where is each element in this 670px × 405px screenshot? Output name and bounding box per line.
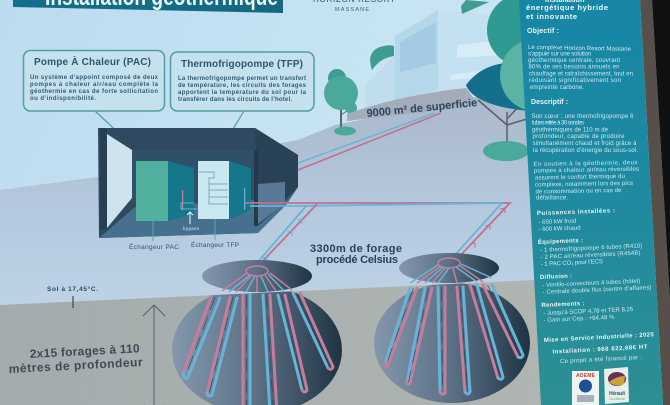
callout: Pompe à chaleur: Un système d’appoint composé de deux [30, 75, 159, 81]
label: Échangeur TFP [191, 219, 239, 249]
commissioning and cost: Installation : 968 822,68€ HT [552, 345, 648, 356]
description: tubes reliée à 30 sondes [532, 120, 584, 126]
well 1 sphere with boreholes [172, 286, 342, 405]
description: pompes à chaleur air/eau réversibles [534, 167, 639, 174]
PAC exchanger [136, 161, 194, 221]
efficiency: - Jusqu’à SCOP 4,78 et TER 8,25 [543, 307, 634, 317]
description: la récupération d’énergie du sous-sol. [533, 148, 638, 154]
callout: Pompe à chaleur: Pompe À Chaleur (PAC) [34, 55, 151, 68]
equipment [538, 233, 643, 268]
text: depth of boreholes: 2x15 forages à 110 [29, 341, 140, 361]
hill ground [0, 88, 545, 312]
depth arrow [143, 305, 165, 405]
label: Échangeur PAC [129, 221, 179, 251]
objective: s’appuie sur une solution [528, 52, 591, 58]
well 1 opening [202, 260, 312, 292]
callout: Thermofrigopompe: Thermofrigopompe (TFP) [181, 59, 303, 70]
logo: Horizon Resort Massane: MASSANE [335, 7, 369, 13]
callout: Pompe à chaleur: géothermie en cas de forte sollicitation [30, 89, 158, 95]
logo: Hérault [604, 367, 629, 404]
description [531, 99, 639, 202]
installed power: Puissances installées : [537, 208, 615, 217]
commissioning and cost [544, 332, 656, 366]
label: bypass: bypass [183, 226, 200, 231]
panel heading: et innovante [526, 12, 577, 21]
text: 3300m de forage [310, 243, 402, 266]
installed power: - 650 kW froid [538, 219, 576, 226]
surface label: 9000 m² [347, 88, 478, 121]
soil layer [0, 280, 545, 405]
description: Son cœur : une thermofrigopompe 6 [532, 114, 634, 120]
panel: project description [519, 0, 663, 405]
small left tree [324, 69, 358, 136]
equipment: - 1 thermofrigopompe 6 tubes (R410) [540, 243, 642, 254]
objective: 80% de ses besoins annuels en [528, 64, 620, 70]
internal pipes [181, 203, 197, 209]
text: 3300m de forage: procédé Celsius [316, 254, 398, 266]
equipment: - 2 PAC air/eau réversibles (R454B) [540, 251, 641, 261]
description: Descriptif : [531, 99, 568, 106]
ground temperature label: Sol à 17,45°C. [47, 285, 98, 293]
description: assurent le confort thermique du [535, 174, 625, 181]
ground temperature label [47, 285, 98, 308]
logo: Hérault: Occitanie [609, 396, 626, 401]
label: Échangeur PAC: Échangeur PAC [129, 242, 179, 251]
callout: Thermofrigopompe: de température, les circuits des forages [178, 83, 307, 89]
callout: Thermofrigopompe [170, 52, 314, 162]
background building [365, 10, 505, 108]
title banner [13, 0, 283, 13]
objective: chauffage et rafraîchissement, tout en [529, 72, 633, 78]
objective: empreinte carbone. [530, 85, 584, 91]
label: Échangeur TFP: Échangeur TFP [191, 240, 239, 249]
well 2 opening [399, 253, 499, 283]
logo: Hérault: Hérault [609, 391, 625, 397]
installed power [537, 208, 616, 233]
objective: réduisant significativement son [529, 78, 621, 84]
diffusion [540, 270, 652, 296]
description: En soutien à la géothermie, deux [533, 160, 638, 168]
description: profondeur, capable de produire [532, 134, 625, 140]
commissioning and cost: Mise en Service Industrielle : 2025 [544, 332, 655, 344]
well 2 sphere with boreholes [374, 283, 530, 403]
description: défaillance. [536, 196, 568, 202]
objective [527, 28, 633, 91]
panel heading [526, 0, 608, 21]
objective: géothermique centrale, couvrant [528, 58, 620, 64]
objective: Objectif : [527, 28, 559, 35]
text: depth of boreholes: mètres de profondeur [8, 355, 143, 376]
callout: Pompe à chaleur: ou d’indisponibilité. [30, 96, 96, 102]
description: de consommation ou en cas de [535, 188, 622, 195]
logo: ADEME: ADEME [576, 373, 596, 379]
diffusion: - Ventilo-convecteurs 4 tubes (hôtel) [542, 279, 640, 289]
arrow pipes between wells and building [245, 203, 510, 264]
commissioning and cost: Ce projet a été financé par : [560, 355, 642, 365]
callout: Thermofrigopompe: La thermofrigopompe permet un transfert [178, 76, 306, 82]
technical building [98, 128, 298, 238]
efficiency: Rendements : [541, 301, 585, 309]
description: simultanément chaud et froid grâce à [532, 141, 637, 147]
diffusion: Diffusion : [540, 274, 572, 281]
diffusion: - Centrale double flux (centre d’affaires) [542, 285, 652, 296]
callout: Pompe à chaleur: pompes à chaleur air/eau complète la [30, 82, 159, 88]
equipment: Équipements : [538, 236, 583, 246]
callout: Pompe à chaleur [24, 50, 164, 162]
logo: Horizon Resort Massane [313, 0, 395, 13]
installed power: - 600 kW chaud [538, 225, 581, 233]
large right tree [466, 0, 570, 161]
leaf tree on building [370, 45, 394, 70]
equipment: - 1 PAC CO₂ pour l’ECS [541, 259, 603, 268]
wall and dark edge [640, 0, 670, 405]
callout: Thermofrigopompe: transférer dans les circuits de l’hotel. [178, 97, 292, 103]
rooftop tree [461, 0, 489, 14]
surface label: 9000 m²: 9000 m² de superficie [366, 97, 478, 120]
objective: Le complexe Horizon Resort Massane [528, 45, 632, 53]
efficiency: - Gain sur Cep : +84,48 % [543, 315, 615, 324]
text: depth of boreholes [8, 341, 143, 376]
TFP exchanger [198, 161, 251, 219]
logo: ADEME [572, 371, 599, 405]
description: complexe, notamment lors des pics [535, 181, 633, 188]
panel heading: énergétique hybride [526, 3, 608, 12]
callout: Thermofrigopompe: apportent la température du sol pour la [178, 90, 307, 96]
arrow pipes to the hotel [298, 113, 441, 170]
description: géothermiques de 110 m de [532, 128, 609, 134]
efficiency [541, 299, 634, 324]
label: bypass [183, 212, 200, 231]
text: 3300m de forage: 3300m de forage [310, 243, 402, 255]
